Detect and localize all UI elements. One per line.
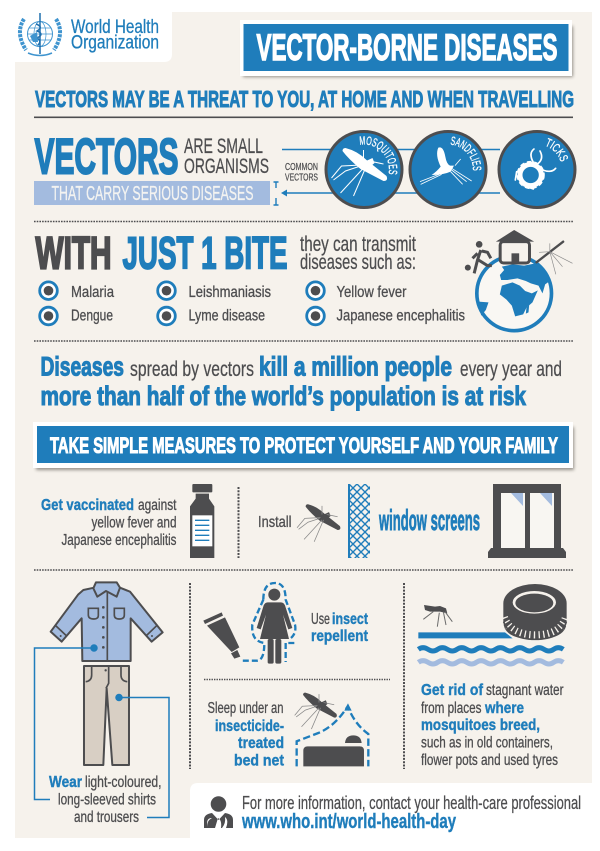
text: get vaccinated: Japanese encephalitis (62, 532, 176, 549)
text: wear light-coloured: Wear (49, 774, 82, 791)
text: use insect repellent: Use (311, 611, 330, 628)
text: get vaccinated: against (138, 497, 177, 514)
text: get rid of stagnant water (421, 682, 564, 769)
vectors heading: ARE SMALL (184, 135, 263, 158)
text: get rid of stagnant water: stagnant water (486, 682, 564, 699)
footer panel (190, 783, 600, 851)
text: get rid of stagnant water: mosquitoes breed, (421, 717, 540, 734)
vectors heading: ORGANISMS (184, 155, 269, 178)
footer panel: www.who.int/world-health-day (241, 811, 457, 833)
logo: World Health Organization: Organization (71, 32, 159, 54)
disease list: Leishmaniasis (188, 284, 271, 301)
icon: WHO emblem (20, 13, 60, 56)
common vectors connector: COMMON (285, 161, 318, 173)
text: get vaccinated (41, 497, 177, 549)
statement: kill a million people: Diseases (40, 352, 124, 382)
with just 1 bite heading: JUST 1 BITE (122, 228, 288, 278)
icon: bed under net (297, 703, 368, 766)
icon: ticks circle: TICKS (546, 138, 568, 162)
logo: World Health Organization: World Health (71, 17, 159, 38)
statement: kill a million people (40, 352, 562, 411)
icon: repellent tube and protected woman (203, 583, 297, 664)
icon: vaccine bottle (190, 484, 214, 558)
icon: mosquito at window (297, 504, 340, 542)
icon: mosquito over bed (295, 693, 337, 729)
logo: World Health Organization (15, 12, 172, 62)
band: that carry serious diseases: THAT CARRY SERIOUS DISEASES (52, 183, 254, 205)
text: sleep under a bed net: insecticide- (215, 718, 284, 735)
text: sleep under a bed net: bed net (234, 752, 285, 770)
text: wear light-coloured: and trousers (74, 809, 139, 826)
band: that carry serious diseases (34, 181, 270, 205)
statement: kill a million people: spread by vectors (130, 358, 254, 381)
text: wear light-coloured: light-coloured, (85, 774, 162, 791)
text: install: Install (258, 514, 292, 531)
icon: mosquitoes circle: MOSQUITOES (360, 136, 398, 174)
text: get rid of stagnant water: Get rid of (421, 682, 484, 699)
text: use insect repellent (311, 611, 369, 645)
text: use insect repellent: repellent (311, 628, 369, 645)
icon: sandflies circle (408, 130, 488, 209)
text: get rid of stagnant water: such as in old containers, (421, 734, 553, 752)
icon: sandflies circle: SANDFLIES (450, 136, 482, 170)
disease list (40, 282, 465, 325)
disease list: Japanese encephalitis (336, 308, 465, 324)
icon: tyre, mosquito and stagnant water (418, 584, 567, 664)
text: sleep under a bed net: treated (238, 735, 284, 752)
title banner (240, 20, 573, 77)
text: sleep under a bed net: Sleep under an (208, 700, 284, 717)
text: sleep under a bed net (208, 700, 285, 770)
common vectors connector: VECTORS (285, 172, 318, 184)
callout lines: shirt and trousers (34, 645, 169, 818)
icon: globe with house, person and mosquito (465, 230, 572, 331)
statement: kill a million people: kill a million people (259, 352, 452, 382)
text: wear light-coloured (49, 774, 162, 826)
measures banner (33, 422, 574, 470)
icon: health-care professional (204, 796, 233, 828)
with just 1 bite heading: WITH (36, 228, 112, 278)
icon: window (488, 484, 566, 558)
disease list: Dengue (71, 308, 113, 324)
common vectors connector (274, 150, 500, 205)
with just 1 bite heading: they can transmit (300, 233, 416, 256)
text: get rid of stagnant water: from places (421, 700, 482, 717)
vectors heading: VECTORS (34, 128, 178, 184)
icon: mosquitoes circle (324, 130, 404, 209)
disease list: Malaria (71, 284, 114, 301)
icon: shirt and trousers (51, 582, 163, 765)
with just 1 bite heading: diseases such as: (300, 251, 416, 274)
text: wear light-coloured: long-sleeved shirts (58, 792, 156, 808)
disease list: Lyme disease (188, 308, 265, 324)
text: get vaccinated: Get vaccinated (41, 497, 134, 514)
statement: kill a million people: every year and (460, 358, 562, 381)
icon: window screen mesh (348, 484, 370, 558)
text: window screens (379, 505, 480, 537)
text: use insect repellent: insect (332, 611, 369, 628)
text: get rid of stagnant water: where (484, 700, 524, 717)
text: get vaccinated: yellow fever and (92, 514, 176, 532)
icon: ticks circle (498, 130, 576, 209)
disease list: Yellow fever (336, 284, 407, 301)
